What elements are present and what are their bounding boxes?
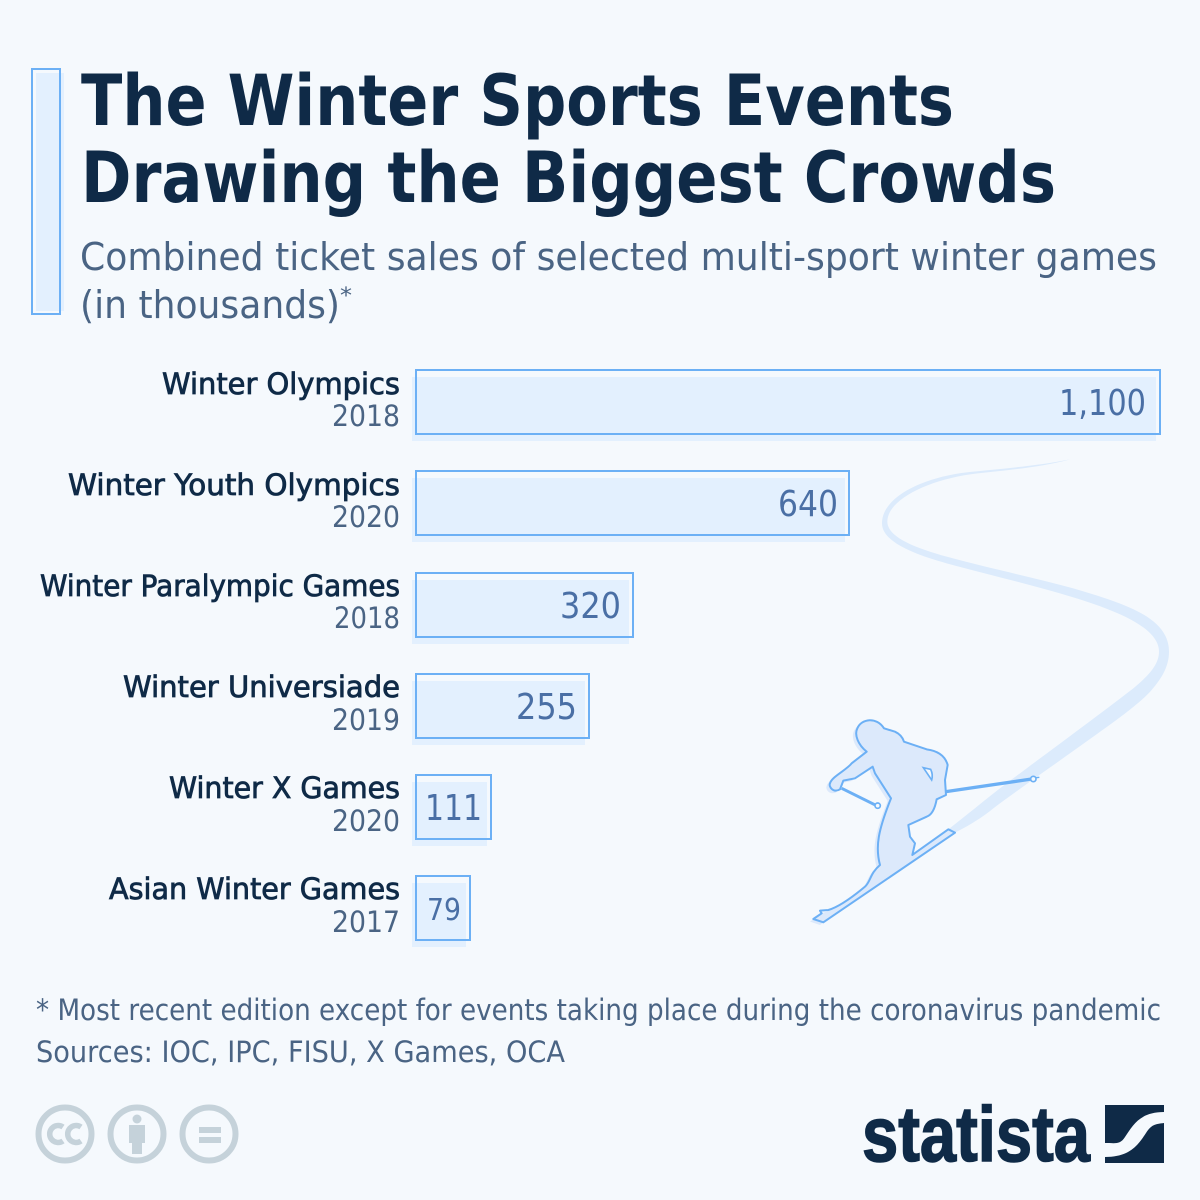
ski trail	[882, 459, 1169, 833]
subtitle: (in thousands)	[80, 283, 340, 327]
row: Winter Universiade	[123, 670, 589, 745]
title	[81, 60, 1056, 219]
icon: attribution	[110, 1108, 164, 1160]
row: Winter Paralympic Games: Winter Paralympic Games	[40, 569, 400, 603]
row: Asian Winter Games	[109, 872, 470, 947]
icon: logo mark	[1105, 1105, 1164, 1163]
row: Winter Youth Olympics	[68, 468, 849, 542]
row: Winter X Games: 2020	[332, 804, 400, 838]
icon: creative commons licence	[38, 1108, 236, 1160]
title accent bar	[32, 69, 64, 314]
row: Winter Universiade: 255	[516, 687, 577, 728]
row: Winter Paralympic Games: 2018	[334, 601, 400, 635]
row: Asian Winter Games: 2017	[332, 905, 400, 939]
row: Winter Youth Olympics: 640	[778, 484, 838, 525]
subtitle: Combined ticket sales of selected multi-sport winter games	[80, 235, 1157, 279]
row: Winter X Games: 111	[425, 788, 482, 829]
row: Winter X Games	[169, 771, 491, 846]
subtitle: *	[340, 284, 352, 309]
row: Winter Universiade: 2019	[332, 703, 400, 737]
icon: cc	[38, 1108, 92, 1160]
row: Winter X Games: Winter X Games	[169, 771, 400, 805]
statista logo	[862, 1090, 1164, 1178]
row: Winter Universiade: Winter Universiade	[123, 670, 400, 704]
row: Asian Winter Games: Asian Winter Games	[109, 872, 400, 906]
title: The Winter Sports Events	[81, 60, 954, 142]
row: Asian Winter Games: 79	[427, 893, 461, 928]
icon: no derivatives	[182, 1108, 236, 1160]
footnote and sources	[36, 993, 1161, 1069]
row: Winter Youth Olympics: Winter Youth Olympics	[68, 468, 400, 502]
row: Winter Olympics: 1,100	[1059, 383, 1146, 424]
row: Winter Youth Olympics: 2020	[332, 500, 400, 534]
row: Winter Olympics: Winter Olympics	[162, 367, 400, 401]
row: Winter Olympics: 2018	[332, 399, 400, 433]
row: Winter Paralympic Games	[40, 569, 633, 644]
subtitle	[80, 235, 1157, 327]
wordmark: statista	[862, 1090, 1091, 1178]
row: Winter Paralympic Games: 320	[560, 586, 621, 627]
footnote and sources: Sources: IOC, IPC, FISU, X Games, OCA	[36, 1035, 565, 1069]
title: Drawing the Biggest Crowds	[81, 137, 1056, 219]
bar chart	[40, 367, 1160, 947]
row: Winter Olympics	[162, 367, 1160, 441]
icon: skier	[810, 720, 1039, 925]
